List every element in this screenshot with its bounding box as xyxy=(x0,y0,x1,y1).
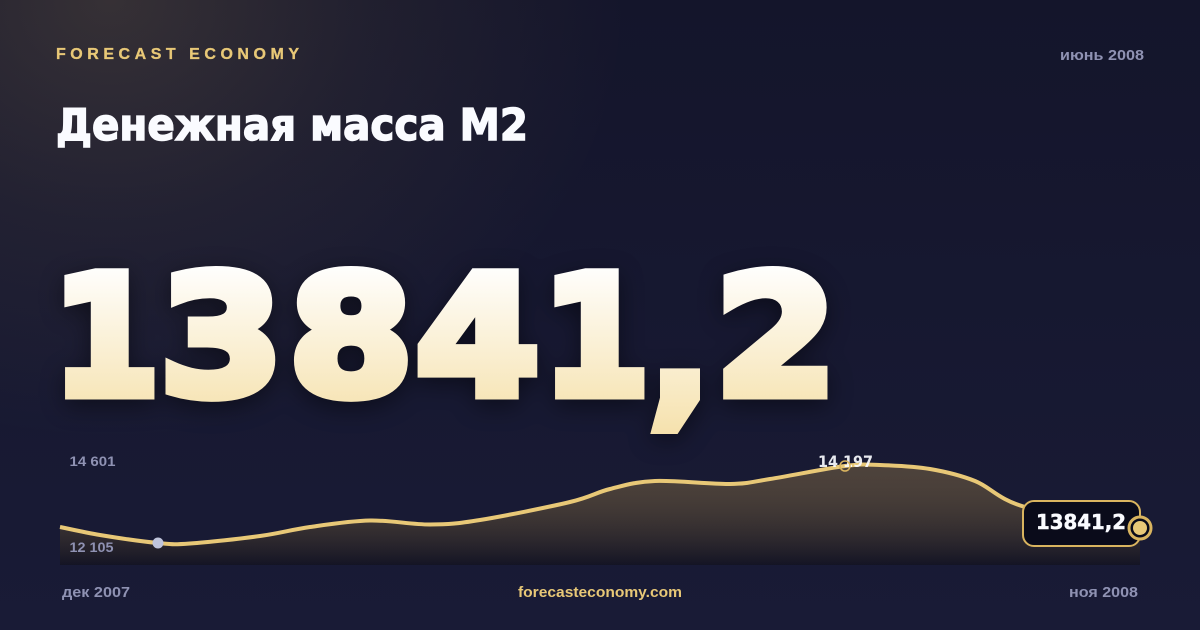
current value callout xyxy=(1023,501,1140,546)
main value: 2 xyxy=(715,242,837,434)
axis min label: 12 105 xyxy=(70,539,114,555)
end date label: ноя 2008 xyxy=(1069,584,1138,601)
current value callout: 13841,2 xyxy=(1036,510,1126,534)
chart area fill xyxy=(60,464,1140,565)
area chart xyxy=(60,452,1151,565)
axis max label: 14 601 xyxy=(70,453,116,469)
peak value label: 14 197 xyxy=(818,452,873,471)
chart line xyxy=(60,464,1140,544)
date: июнь 2008 xyxy=(1060,47,1144,64)
website: forecasteconomy.com xyxy=(518,584,682,601)
main value xyxy=(52,240,837,444)
current value marker xyxy=(1129,517,1151,539)
main value: 8 xyxy=(289,242,413,433)
main value: , xyxy=(649,252,711,444)
main value: 1 xyxy=(542,240,650,433)
main value: 3 xyxy=(160,242,283,433)
minimum marker xyxy=(152,538,164,548)
peak marker xyxy=(840,461,850,471)
brand name: FORECAST ECONOMY xyxy=(56,46,299,63)
start date label: дек 2007 xyxy=(62,584,130,601)
title: Денежная масса М2 xyxy=(56,100,528,151)
main value: 4 xyxy=(416,242,539,433)
main value: 1 xyxy=(52,240,160,433)
